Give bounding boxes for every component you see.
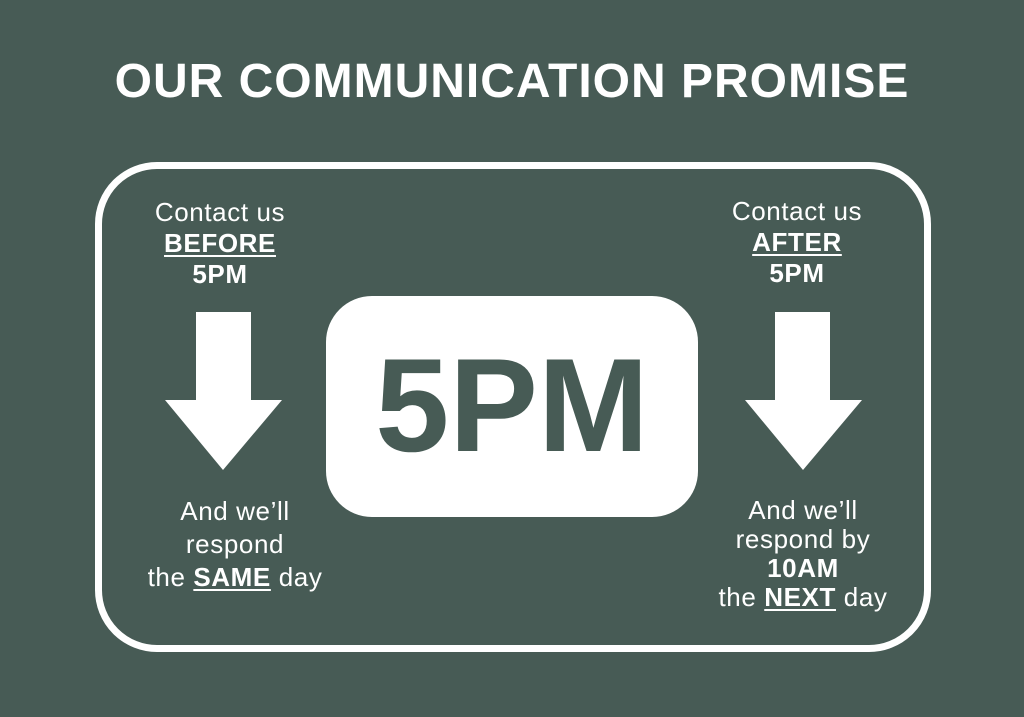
text: before 5pm heading: Contact us (155, 197, 285, 227)
badge text: 5PM (375, 332, 649, 480)
text: next day response: the NEXT day (718, 582, 888, 612)
center badge: 5PM (326, 296, 698, 517)
text: next day response (718, 495, 888, 612)
title: OUR COMMUNICATION PROMISE (115, 55, 909, 108)
text: before 5pm heading: BEFORE (164, 228, 276, 258)
text: before 5pm heading: 5PM (192, 259, 248, 289)
text: next day response: And we’ll (748, 495, 858, 525)
text: same day response: the SAME day (148, 562, 322, 592)
text: same day response: respond (186, 529, 284, 559)
text: same day response (148, 496, 322, 592)
text: after 5pm heading: Contact us (732, 196, 862, 226)
text: after 5pm heading: 5PM (769, 258, 825, 288)
text: same day response: And we’ll (180, 496, 290, 526)
text: next day response: 10AM (767, 553, 839, 583)
text: after 5pm heading (732, 196, 862, 288)
text: next day response: respond by (736, 524, 870, 554)
text: after 5pm heading: AFTER (752, 227, 842, 257)
panel: outer rounded frame (95, 162, 931, 652)
icon: right down arrow (745, 312, 862, 470)
text: before 5pm heading (155, 197, 285, 289)
icon: left down arrow (165, 312, 282, 470)
